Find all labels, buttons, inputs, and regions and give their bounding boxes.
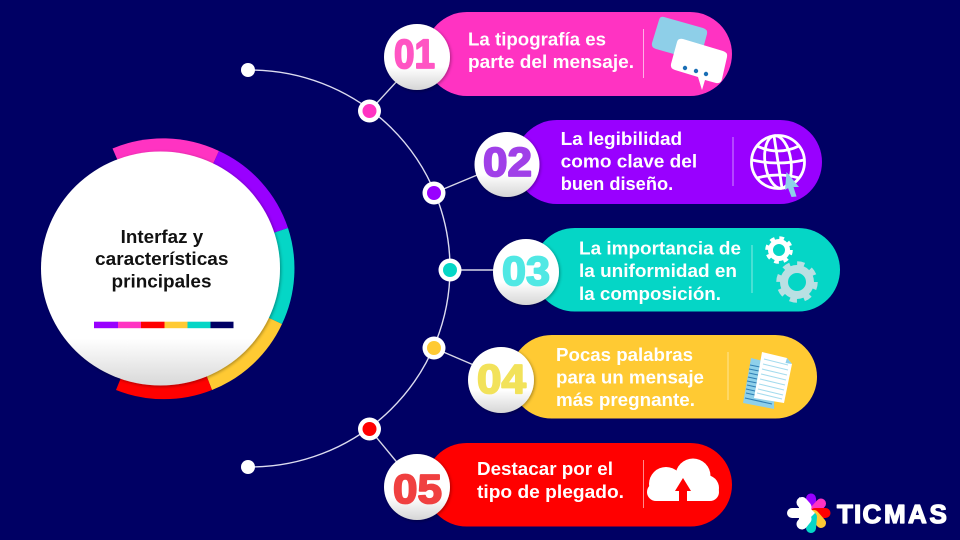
pill 01 bbox=[425, 12, 732, 96]
logo: TICMAS bbox=[792, 497, 947, 529]
node 1 bbox=[358, 100, 381, 122]
central heading: características bbox=[95, 249, 228, 269]
text 02: como clave del bbox=[561, 150, 697, 172]
ring segment: yellow bbox=[165, 269, 282, 390]
ring segment: red bbox=[116, 269, 212, 399]
divider 02 bbox=[732, 137, 734, 186]
logo mark bbox=[792, 497, 826, 529]
central heading: Interfaz y bbox=[121, 227, 203, 247]
pill 05 bbox=[425, 443, 732, 526]
ring segment: purple bbox=[165, 151, 288, 269]
panel: item 01 bbox=[384, 12, 732, 96]
pill 04 bbox=[510, 335, 817, 418]
text 04: más pregnante. bbox=[556, 389, 695, 410]
arc end dot: bottom bbox=[241, 460, 255, 474]
text 03: La importancia de bbox=[579, 237, 741, 258]
pill 03 bbox=[533, 228, 840, 312]
ring segment: pink bbox=[112, 138, 219, 269]
number badge 03 bbox=[493, 239, 559, 305]
ring segment: teal bbox=[165, 228, 294, 324]
text 02: La legibilidad bbox=[561, 128, 682, 149]
text 02 bbox=[561, 128, 697, 194]
central heading: principales bbox=[112, 272, 212, 292]
divider 01 bbox=[642, 29, 644, 78]
divider 05 bbox=[642, 460, 644, 508]
text 01 bbox=[468, 29, 634, 72]
number badge 05: 05 bbox=[393, 466, 442, 512]
divider 04 bbox=[727, 352, 729, 400]
connector lines bbox=[370, 80, 496, 466]
icon: cloud upload bbox=[647, 458, 719, 502]
text 01: parte del mensaje. bbox=[468, 51, 634, 72]
text 02: buen diseño. bbox=[561, 173, 673, 194]
text 04 bbox=[556, 344, 704, 410]
text 05: tipo de plegado. bbox=[477, 481, 624, 502]
number badge 01 bbox=[384, 24, 450, 90]
text 05 bbox=[477, 458, 624, 502]
node 3 bbox=[438, 258, 462, 282]
panel: item 03 bbox=[493, 228, 840, 312]
arc end dot: top bbox=[241, 63, 255, 77]
node 2 bbox=[422, 182, 446, 204]
text 03: la composición. bbox=[579, 283, 721, 304]
timeline arc bbox=[248, 70, 450, 467]
icon: globe with cursor bbox=[752, 134, 804, 197]
node 5 bbox=[358, 418, 381, 440]
text 04: para un mensaje bbox=[556, 366, 704, 388]
node 4 bbox=[422, 336, 446, 360]
logo wordmark: TICMAS bbox=[837, 499, 947, 529]
central circle panel bbox=[41, 138, 294, 399]
text 03 bbox=[579, 237, 741, 304]
number badge 01: 01 bbox=[394, 31, 435, 77]
text 05: Destacar por el bbox=[477, 458, 613, 479]
number badge 04: 04 bbox=[477, 356, 526, 402]
number badge 05 bbox=[384, 454, 450, 520]
text 03: la uniformidad en bbox=[579, 260, 737, 281]
icon: chat bubbles bbox=[652, 17, 727, 90]
colour bar bbox=[94, 322, 234, 328]
white disc bbox=[41, 152, 280, 386]
pill 02 bbox=[515, 120, 822, 204]
panel: item 02 bbox=[474, 120, 822, 204]
divider 03 bbox=[751, 245, 753, 293]
number badge 04 bbox=[468, 347, 534, 413]
central heading bbox=[95, 227, 228, 292]
icon: documents bbox=[743, 352, 792, 409]
text 01: La tipografía es bbox=[468, 29, 606, 50]
text 04: Pocas palabras bbox=[556, 344, 693, 365]
panel: item 04 bbox=[468, 335, 817, 418]
panel: item 05 bbox=[384, 443, 732, 526]
icon: gears bbox=[767, 238, 816, 300]
number badge 03: 03 bbox=[502, 248, 550, 294]
number badge 02: 02 bbox=[483, 139, 532, 185]
number badge 02 bbox=[474, 132, 540, 197]
